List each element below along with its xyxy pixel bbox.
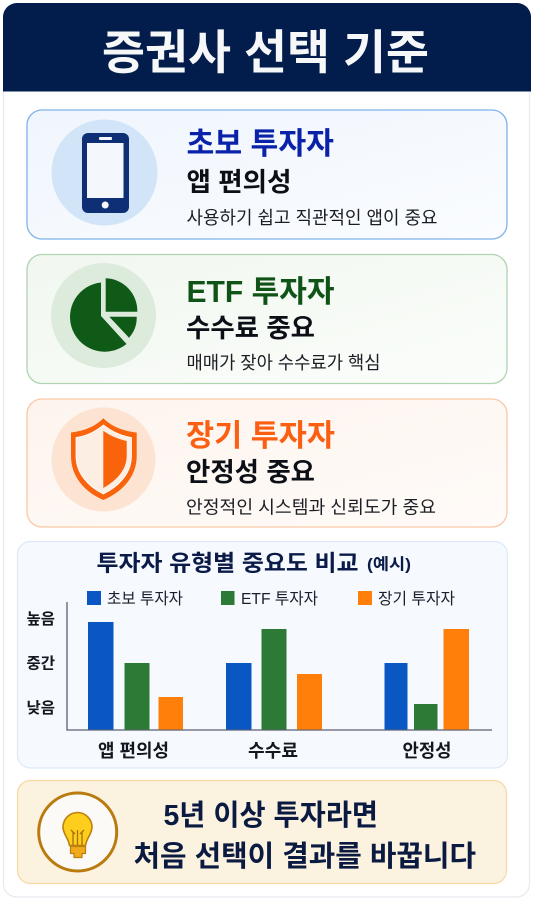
- bars: fees: [226, 629, 322, 730]
- callout text line 2: 처음 선택이 결과를 바꿉니다: [134, 840, 476, 873]
- bars: app convenience: [88, 622, 183, 730]
- panel: ETF investor: [27, 254, 507, 384]
- y axis labels: [26, 610, 55, 717]
- panel: beginner investor: [27, 110, 507, 239]
- x axis labels: 수수료: [248, 741, 298, 761]
- legend: 초보 투자자: [107, 590, 183, 608]
- card heading: 초보 투자자: [186, 127, 334, 161]
- icon: shield: [52, 408, 156, 512]
- chart title: 투자자 유형별 중요도 비교: [96, 551, 358, 576]
- panel: long-term investor: [27, 399, 507, 527]
- title: 증권사 선택 기준: [102, 26, 429, 79]
- legend: [87, 590, 455, 608]
- y axis labels: 높음: [26, 610, 55, 628]
- icon: light bulb: [39, 793, 117, 871]
- chart title note: (예시): [367, 556, 411, 574]
- card heading: 장기 투자자: [186, 419, 335, 453]
- header banner: [3, 3, 531, 92]
- card subheading: 앱 편의성: [186, 167, 292, 197]
- legend: 장기 투자자: [378, 590, 455, 608]
- card description: 사용하기 쉽고 직관적인 앱이 중요: [186, 208, 438, 228]
- card subheading: 안정성 중요: [186, 457, 315, 487]
- x axis labels: [98, 741, 452, 761]
- panel: comparison chart: [18, 542, 508, 768]
- bars: stability: [384, 629, 469, 730]
- x axis labels: 앱 편의성: [98, 741, 169, 761]
- callout text line 1: 5년 이상 투자라면: [164, 799, 378, 832]
- icon: pie chart: [51, 263, 156, 368]
- card description: 매매가 잦아 수수료가 핵심: [186, 353, 380, 373]
- callout: [18, 780, 506, 884]
- card subheading: 수수료 중요: [186, 313, 315, 343]
- axes: [67, 602, 492, 730]
- card heading: ETF 투자자: [186, 275, 334, 309]
- y axis labels: 중간: [26, 654, 55, 672]
- x axis labels: 안정성: [402, 741, 452, 761]
- card description: 안정적인 시스템과 신뢰도가 중요: [186, 498, 436, 518]
- icon: smartphone: [52, 120, 158, 226]
- legend: ETF 투자자: [241, 590, 318, 608]
- y axis labels: 낮음: [26, 699, 55, 717]
